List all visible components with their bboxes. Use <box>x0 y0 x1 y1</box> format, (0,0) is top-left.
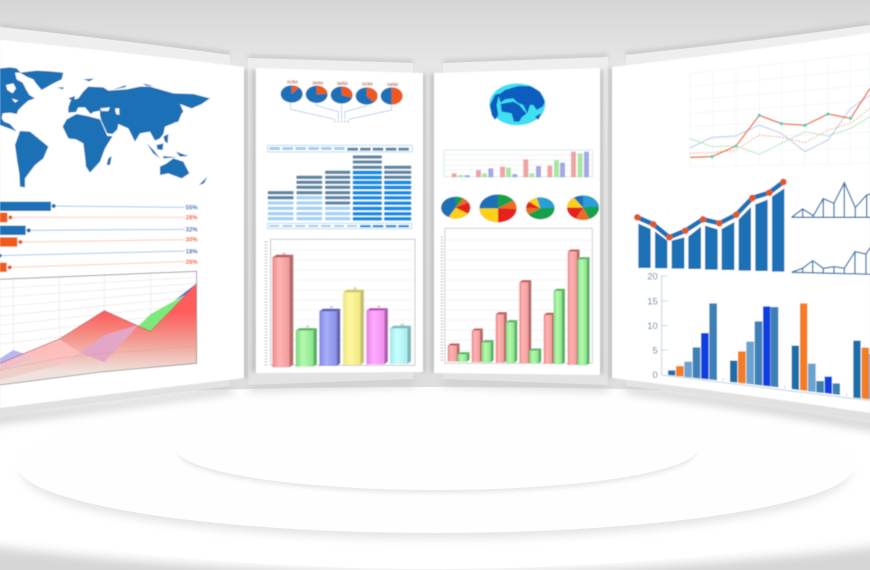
pie row: 35/50 <box>337 81 348 86</box>
floor outer ring <box>0 400 870 569</box>
panel surface <box>612 33 870 413</box>
pie row: 31/50 <box>287 79 298 84</box>
floor <box>0 387 870 570</box>
panel: world map and metrics <box>0 40 244 408</box>
3D bar chart: six colours: 25 <box>306 324 310 328</box>
combo column and trend chart <box>634 179 787 272</box>
spike chart: upper <box>792 183 870 217</box>
pie row: 5 <box>347 119 349 123</box>
world map <box>0 67 210 187</box>
y axis labels: 0 <box>652 370 658 380</box>
panel shadows <box>0 378 870 431</box>
area chart <box>0 271 197 385</box>
panel: pies and stacked levels <box>256 68 423 373</box>
floor middle ring shadow <box>22 406 850 538</box>
grouped column chart <box>647 272 870 401</box>
panel: globe and pies <box>434 68 600 375</box>
y axis labels: 15 <box>647 296 658 306</box>
floor inner ring <box>176 406 698 490</box>
pie: green majority <box>526 197 555 219</box>
pie: small left <box>441 197 470 219</box>
metric bars: 28% <box>186 216 198 222</box>
pie row <box>281 79 403 123</box>
3D bar chart: six colours: 40 <box>377 305 381 309</box>
panel surface <box>0 40 244 408</box>
pie: right <box>567 195 599 220</box>
spike chart: lower <box>792 243 870 274</box>
3D bar chart: six colours: 55 <box>353 286 357 290</box>
top edge shadows <box>0 24 870 62</box>
back strip: left panel <box>0 27 230 415</box>
panel surface <box>434 68 600 375</box>
pie row: 2 <box>337 119 339 123</box>
panel edge shadows <box>243 68 613 378</box>
globe icon <box>489 83 545 125</box>
3D bar chart: six colours: 80 <box>282 251 286 255</box>
panel surface <box>256 68 423 373</box>
y axis labels: 10 <box>647 321 658 331</box>
floor outer ring shadow <box>0 545 870 570</box>
metric bars: 55% <box>186 205 198 211</box>
pie row: 31/50 <box>362 82 373 87</box>
back wall <box>0 0 870 392</box>
mini grouped bar chart <box>444 150 592 177</box>
y axis labels <box>647 272 658 380</box>
y axis labels: 5 <box>652 345 658 355</box>
pie row: 25/50 <box>312 80 324 85</box>
floor middle ring <box>17 397 855 533</box>
y axis labels: 20 <box>647 272 658 282</box>
3D bar chart: six colours: 26 <box>401 322 404 326</box>
3D bar chart: six colours <box>266 239 415 367</box>
metric bars <box>0 202 198 272</box>
pie: large <box>479 194 517 222</box>
3D bar chart: red and green pairs <box>442 228 592 365</box>
back strip: right panel <box>626 25 870 421</box>
metric bars: 30% <box>186 238 198 244</box>
pie row: 1 <box>334 119 336 123</box>
pie row: 3 <box>341 119 343 123</box>
pie row: 4 <box>344 119 346 123</box>
metric bars: 32% <box>186 227 198 233</box>
panel: line, combo and column charts <box>612 33 870 413</box>
metric bars: 26% <box>186 260 198 266</box>
floor inner ring shadow <box>178 411 696 493</box>
back strip: centre left panel <box>248 58 413 385</box>
stacked level chart <box>268 145 412 229</box>
3D bar chart: six colours: 40 <box>330 305 333 309</box>
metric bars: 18% <box>186 249 198 255</box>
content group <box>0 33 870 413</box>
pie row: 24/50 <box>387 82 399 87</box>
back strip: centre right panel <box>443 57 608 385</box>
multi-line chart <box>690 53 870 167</box>
